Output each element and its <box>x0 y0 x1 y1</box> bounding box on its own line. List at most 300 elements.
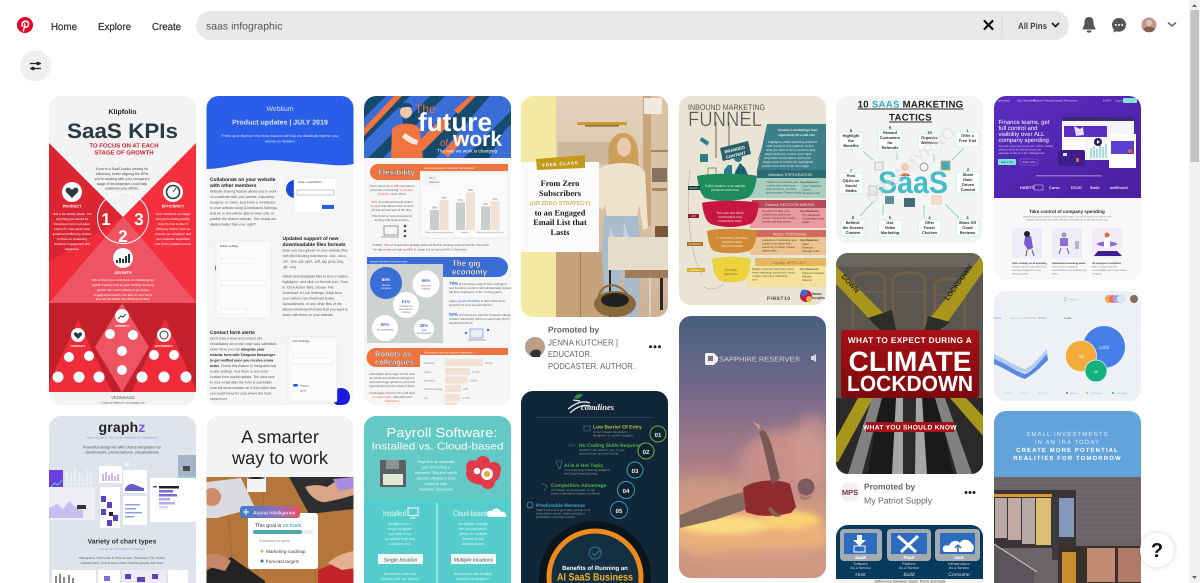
stage circle with numbers: 2 <box>118 227 128 246</box>
icon: laptop network <box>465 329 489 340</box>
advertiser name: PODCASTER. AUTHOR. <box>548 361 635 371</box>
funnel stage: advocacy: home marketing, social pitch, social <box>752 272 795 274</box>
benefit bubbles: Flexible <box>382 284 391 287</box>
intro text <box>94 167 150 190</box>
hero headline: visibility over ALL <box>998 131 1045 138</box>
section: robots as colleagues: Respondents who feel ready for automation <box>424 352 473 354</box>
headline box: LOCKDOWN <box>847 371 973 396</box>
section: robots as colleagues: Automation and image trends such <box>369 372 416 376</box>
bar chart: robots <box>445 359 483 405</box>
funnel stage: exploration: and outcomes. These include <box>766 192 802 194</box>
reason 05: 05 <box>616 508 623 515</box>
top bar: Search <box>1069 298 1079 302</box>
reason 03: AI is becoming massively adopted <box>564 468 610 472</box>
feature captions: All employees' workflows <box>1092 262 1122 265</box>
tactic labels: 9 <box>889 125 892 130</box>
reason 03: 03 <box>632 468 639 475</box>
section: robots as colleagues: Robots as <box>375 350 411 358</box>
bar chart: work preference: 50% <box>441 196 447 200</box>
icon: account chevron <box>1168 22 1176 26</box>
reason 01: Low Barrier Of Entry <box>593 424 642 430</box>
pin: The future of work <box>364 96 513 405</box>
description: Powerful design kit with charts templates for <box>83 444 162 450</box>
section: contact form alerts: Don't miss a lead and contact him <box>210 336 263 340</box>
section: contact form alerts: in site settings. And there is one more <box>210 370 268 374</box>
funnel stage: exploration: Publish and promotes your <box>766 181 798 184</box>
tactic labels: Content <box>846 230 861 235</box>
closing text: location and one person <box>381 577 419 581</box>
icon: product heart <box>62 182 82 202</box>
top bar <box>1064 295 1138 303</box>
tactic labels: Offer a <box>961 133 975 138</box>
flexibility text: flexibility" since 2019. <box>378 192 406 196</box>
escalators <box>836 398 983 474</box>
funnel stage: decision making: This web site offers <box>716 211 744 215</box>
section: contact form alerts: came from. <box>210 397 228 401</box>
project list <box>260 549 306 564</box>
teal content panel: with Content is the platform. Here's <box>767 144 814 148</box>
intro text: If you're a SaaS leader striving for <box>96 167 149 171</box>
purple hero <box>994 96 1141 198</box>
funnel stage: decision making: functionality and <box>718 215 742 219</box>
tactic labels: Share <box>963 172 974 177</box>
pin: Payroll software comparison <box>364 416 511 583</box>
top navigation bar <box>17 11 1176 40</box>
tactic labels: Media <box>845 188 857 193</box>
benefit bubbles: Self <box>422 329 426 332</box>
feature captions: reconciliations and bookkeeping <box>1052 269 1087 272</box>
benefit bubbles: 80% <box>381 322 389 327</box>
gig economy text: Again, greater flexibility is often cited as an <box>449 299 506 303</box>
stage labels <box>63 204 185 275</box>
bubble chart: 45 <box>1094 370 1098 374</box>
hero buttons <box>998 159 1038 165</box>
column text: Installed: and able to be <box>389 532 411 536</box>
progress bar <box>253 530 313 534</box>
SaaS tile <box>840 529 882 561</box>
IaaS tile: IaaS <box>954 555 964 560</box>
sub-label <box>863 422 957 432</box>
flexibility text: job posts mentioning "workplace <box>370 188 414 192</box>
pin: Inbound marketing funnel: FUNNEL <box>688 108 762 131</box>
subtitle <box>89 143 158 155</box>
intro text: stage of development could help <box>97 182 147 186</box>
headline <box>533 179 587 237</box>
nav link: Home: Home <box>51 22 77 33</box>
gig economy text: 92% of freelancers said the freelance lifestyle <box>449 312 513 317</box>
pin: bubble chart dashboard <box>994 291 1141 401</box>
section: robots as colleagues: Spain <box>424 371 431 374</box>
stage descriptions: only thing you should be <box>56 217 89 221</box>
gig economy text: and freelance workers will substantially replace <box>449 286 512 290</box>
closing text: Businesses with multiple <box>454 572 492 576</box>
tactic labels: 10 <box>927 130 932 135</box>
funnel stage: decision making: Key Measures: <box>800 210 819 213</box>
tactic labels: 5 <box>889 215 892 220</box>
avatar: MPS <box>842 488 858 497</box>
credit: Venngage <box>101 396 145 404</box>
headline: From Zero <box>541 179 579 188</box>
section tagline: Full set of chart styles & variations <box>99 547 145 551</box>
ad headline <box>1013 431 1122 462</box>
brand: Weblium: Weblium <box>266 105 294 113</box>
project list: Marketing roadmap <box>266 549 306 554</box>
caution tape top: DOWN <box>840 274 860 295</box>
gig economy text <box>449 281 513 325</box>
section: downloadable files: above-mentioned formats that you want to <box>282 308 348 312</box>
tactic labels: Social <box>845 183 857 188</box>
nav link: Explore: Explore <box>98 22 131 33</box>
funnel stage: advocacy: content, Send your marketing <box>752 275 788 278</box>
funnel stage: exploration <box>688 170 826 201</box>
tactic labels: 6 <box>852 215 855 220</box>
advertiser name: EDUCATOR. <box>548 349 592 359</box>
service verbs <box>855 572 970 578</box>
hero banner: work <box>452 128 502 151</box>
column text: Installed: accessed from that <box>385 537 415 541</box>
funnel stage: advocacy: Referral <box>802 279 812 282</box>
bar chart: work preference: 63% <box>468 189 474 192</box>
funnel stage: purchase: content must assist from <box>762 242 792 246</box>
tactic labels: the-Scenes <box>843 225 863 230</box>
headline <box>231 427 329 468</box>
tactic labels: 1 <box>966 128 969 133</box>
banner: multiple locations: Multiple locations <box>454 558 494 564</box>
section: downloadable files: your visitors can download books, <box>282 296 335 300</box>
feature captions <box>1012 262 1127 276</box>
logo strip: Curve <box>1049 186 1060 190</box>
help button: ? <box>1151 540 1163 562</box>
funnel stage: exploration: Visitors <box>802 188 811 192</box>
bar chart: work preference: 47% <box>492 198 498 201</box>
funnel stage: decision making: Top Influencers <box>802 214 821 217</box>
tactic labels: Offer <box>925 220 935 225</box>
funnel stage: decision making: Interest: DECISION MAKING <box>765 203 815 207</box>
funnel stage: purchase: Action: PURCHASE <box>773 232 807 236</box>
ad headline: CREATE MORE POTENTIAL <box>1016 447 1119 454</box>
stage circle with numbers <box>98 192 148 246</box>
brand name: SAPPHIRE RESERVE® <box>719 356 801 364</box>
stage circle with numbers: 3 <box>134 210 144 229</box>
brand logo <box>568 394 615 413</box>
section: robots as colleagues: 18.4% <box>470 380 478 382</box>
feature captions: Build a culture of spend <box>1092 266 1118 268</box>
promoted by: My Patriot Supply: Promoted by <box>864 482 916 492</box>
benefit bubbles: schedule <box>381 287 392 290</box>
column text: Cloud-based: devices to get <box>462 537 484 541</box>
section: robots as colleagues: to replace jobs, and with them <box>372 395 412 399</box>
hero nav: Contact <box>1053 98 1063 102</box>
footer strip <box>836 579 983 583</box>
search query text: saas infographic <box>206 20 282 32</box>
tactic labels: Reward <box>883 130 898 135</box>
column text: Cloud-based: the internet which <box>459 527 487 531</box>
chart mockups <box>49 455 196 528</box>
tag: branded content: CONTENT <box>725 150 747 160</box>
funnel stage: advocacy: Repeat Purchases <box>802 272 825 275</box>
advertiser name: My Patriot Supply <box>864 496 933 506</box>
ad headline: SMALL INVESTMENTS <box>1026 431 1109 438</box>
section: contact form alerts: to get notified once you receive a new <box>210 358 273 362</box>
section paragraph: Spending at work requires process and control. It's not so hard to be able to use <box>1023 216 1112 218</box>
section heading: Take control of company spending <box>1029 209 1105 214</box>
bar chart: work preference: 33% <box>432 206 438 210</box>
headline: Email List that <box>533 218 587 227</box>
brand: graphz <box>98 419 146 435</box>
section heading: Variety of chart types <box>88 538 157 546</box>
stage labels: PRODUCT <box>63 204 82 208</box>
feature illustrations <box>1012 228 1122 258</box>
headline box: CLIMATE <box>848 346 972 377</box>
funnel stage: purchase: search to purchase. Create <box>762 246 795 249</box>
teal content panel: opportunity for a mid-size <box>778 133 815 137</box>
hero nav: Resources <box>1064 98 1078 102</box>
icon: laptop <box>381 225 406 237</box>
flexibility text: This trend is most pronounced <box>372 214 413 218</box>
lower KPI pyramids <box>45 303 197 392</box>
bubble chart: 730 <box>1078 355 1084 359</box>
divider line <box>537 416 653 419</box>
funnel stage: advocacy: Key Measures: <box>800 268 819 271</box>
text panel <box>521 162 599 252</box>
tactic labels: Driven <box>962 182 975 187</box>
funnel stage: purchase: Sales <box>802 243 809 246</box>
reason 02: No Coding Skills Required <box>579 443 642 449</box>
benefit bubbles <box>370 267 440 341</box>
tactic labels: Behind- <box>846 220 861 225</box>
stage descriptions: efficiency metrics such as <box>156 227 191 231</box>
pin: climate lockdown ad <box>836 253 983 474</box>
tactic labels: Data- <box>963 177 974 182</box>
credits: FIRST10 <box>767 296 791 302</box>
bar chart: work preference: Option to work off-site part time <box>425 231 454 234</box>
hero buttons: Watch video <box>1022 161 1036 164</box>
tactic labels: Highlight <box>843 133 860 138</box>
hero banner: of <box>440 138 449 149</box>
ad headline: REALITIES FOR TOMORROW <box>1013 455 1122 462</box>
section: downloadable files: highlight it, and click on the link icon. Then <box>282 280 348 284</box>
brand logo: comdines <box>581 402 615 412</box>
logo strip: Swile <box>1090 186 1100 190</box>
dashboard mockups <box>1058 117 1136 168</box>
intro text: part of running a <box>422 466 451 470</box>
goal status: This goal is on track <box>255 523 302 529</box>
bar chart: work preference: Option to work off-site full time <box>477 231 504 234</box>
section: collaborate: to your website using Contributors Settings, <box>210 206 278 210</box>
closing text <box>381 572 492 581</box>
stage descriptions: happiness. <box>65 247 79 251</box>
small doodle icons <box>869 161 950 207</box>
stage circle with numbers: 1 <box>101 210 111 229</box>
feature captions: Automated accounting admin <box>1052 262 1086 265</box>
section: collaborate: always better than one, right? <box>210 222 256 226</box>
tactic labels: Host <box>847 173 856 178</box>
funnel stage: exploration: Key Measures: <box>800 181 819 184</box>
benefit bubbles: 61% <box>402 299 410 304</box>
chart type list: Labeled bars, Line & Area charts, Bubble graphs and more <box>81 561 164 565</box>
icon: clear search <box>984 21 992 29</box>
goal card <box>240 506 318 569</box>
icon: gear cloud <box>466 456 501 489</box>
section: contact form alerts: now will show website url & form label that <box>210 386 276 390</box>
lower KPI pyramids: GROWTH <box>115 324 129 328</box>
funnel stage: advocacy: now <box>752 278 757 282</box>
header subtitle: website on Weblium <box>265 140 295 144</box>
legend <box>1066 392 1128 395</box>
teal content panel: problems to move to the next stage <box>762 164 809 168</box>
tactic boxes <box>839 130 980 236</box>
flexibility text: among millennial workers. <box>375 218 410 222</box>
funnel stage: decision making: conversion tools <box>718 219 742 223</box>
section: contact form alerts <box>209 330 350 406</box>
search scope: All Pins: All Pins <box>1018 21 1047 31</box>
section: robots as colleagues: represent huge advances and new <box>369 380 416 384</box>
desk <box>608 226 668 317</box>
title: SaaS KPIs: SaaS KPIs <box>67 120 178 143</box>
tactic labels: Marketing <box>881 230 900 235</box>
basket <box>594 285 636 317</box>
column text: Cloud-based: Accessible through <box>458 522 488 526</box>
tactic labels: Reviews <box>960 230 975 235</box>
funnel stage: purchase: CONVERT <box>689 243 702 246</box>
column text: Cloud-based: simultaneously. <box>461 542 485 546</box>
watermark: DREAMYPRO <box>862 122 959 208</box>
tag: Asana Intelligence: Asana Intelligence <box>253 510 296 516</box>
stage descriptions: Your customers are happy <box>156 212 191 216</box>
hero banner: The way we work is changing <box>437 148 497 154</box>
headline box: WHAT TO EXPECT DURING A <box>848 336 972 345</box>
credit: Venngage: VENNGAGE <box>111 395 135 400</box>
section: robots as colleagues: as robots and artificial intelligence <box>369 376 415 380</box>
reason 02 <box>568 443 654 459</box>
tag: free class <box>536 155 585 170</box>
tactic labels: 3 <box>966 215 969 220</box>
intro text: efficiency, better aligning the KPIs <box>96 172 148 176</box>
sub-label: WHAT YOU SHOULD KNOW <box>863 424 957 432</box>
reason 03: AI Is A Hot Topic <box>564 463 603 469</box>
hero paragraph: Say hello, smart way spend less, control, visibility <box>998 145 1054 148</box>
section: robots as colleagues: employees. <box>384 399 400 403</box>
section: contact form alerts: Zapier <box>300 390 307 392</box>
feature captions: 100% visibility on all spending <box>1012 262 1047 265</box>
service verbs: Host <box>855 572 866 578</box>
funnel stage: purchase: Capitalize on marketing, your <box>762 239 797 242</box>
funnel stage: purchase: Key Measures: <box>800 239 819 242</box>
feature captions: Save hours on repetitive <box>1052 266 1078 268</box>
project list: Forecast targets <box>266 559 300 564</box>
service descriptions: As a Service <box>949 566 969 570</box>
teal content panel <box>757 124 826 170</box>
ad headline: IN AN IRA TODAY <box>1035 439 1100 446</box>
section paragraph <box>1023 216 1112 222</box>
section: downloadable files: Attach downloadable files to text or button, <box>282 274 348 278</box>
section: robots as colleagues: 11.7% <box>462 397 470 400</box>
section: flexibility: How people prefer to work after the pandemic <box>424 167 475 170</box>
tabs: Online <box>1038 316 1047 320</box>
stage labels: EFFICIENCY <box>162 204 185 208</box>
tactic labels: the <box>848 138 855 143</box>
column text: Installed <box>385 522 415 546</box>
section: gig economy: The gig <box>452 259 481 268</box>
tactic labels: Customers <box>880 135 900 140</box>
brand logo <box>705 353 816 365</box>
icon: floppy disk <box>380 460 406 487</box>
benefit bubbles: 84% <box>382 277 390 282</box>
funnel stage: exploration: Sessions Lead <box>802 192 820 195</box>
hero paragraph: automate all bills via 0.5% of Budget back <box>998 152 1046 155</box>
section: contact form alerts: How? Now you can integrate your <box>210 348 265 352</box>
flexibility text: to a job that allows them to work <box>371 204 414 208</box>
tactic labels: Free Trial <box>959 138 976 143</box>
promoted by: Jenna Kutcher <box>525 324 661 371</box>
stage descriptions: focusing on here is product- <box>53 222 91 226</box>
section: collaborate: Website sharing feature allows you to work <box>210 190 277 194</box>
icon: scope chevron <box>1052 23 1059 26</box>
tactic labels: 7 <box>850 168 852 173</box>
service verbs: Build <box>903 572 915 578</box>
title: Installed vs. Cloud-based <box>372 442 504 452</box>
service descriptions: As a Service <box>850 566 871 570</box>
sample tiles <box>52 570 188 583</box>
tag: branded content <box>720 141 751 161</box>
service verbs: Consume <box>948 572 970 578</box>
headline: to an Engaged <box>535 208 586 218</box>
teal content panel: Highlight a pitfall marketing problems <box>768 140 818 144</box>
header subtitle <box>222 134 339 142</box>
help button <box>1140 533 1174 567</box>
icon: notifications bell <box>1082 17 1096 33</box>
reason 04 <box>542 482 634 498</box>
section paragraph: solution that keeps your team efficient and informed every step of the way. <box>1026 218 1108 222</box>
stage descriptions: and you're scaling quickly. <box>156 217 191 221</box>
funnel stage: exploration: content about learning to <box>766 184 796 188</box>
advertiser name: JENNA KUTCHER | <box>548 338 618 348</box>
bubble chart: 1205 <box>1099 345 1110 351</box>
closing text: locations or people in <box>456 577 490 581</box>
section: collaborate <box>209 177 337 226</box>
logo strip: wellfound <box>1109 186 1128 190</box>
stage descriptions: revenue per employee and <box>155 232 191 236</box>
service descriptions: Software <box>853 562 868 566</box>
bar chart: work preference: 47% <box>458 199 464 202</box>
subtitle: STAGE OF GROWTH <box>94 150 154 156</box>
feature captions: spend payment. <box>1012 272 1029 276</box>
funnel stage: decision making: nurture. Impressions, social <box>762 217 795 220</box>
pin: 10 SaaS marketing tactics <box>836 96 983 243</box>
section: downloadable files: .gif, .svg. <box>282 265 297 269</box>
brand: Klipfolio: Klipfolio <box>108 108 136 116</box>
caution tape top <box>836 254 983 332</box>
credits <box>767 290 825 302</box>
description <box>83 444 162 454</box>
section: downloadable files: Button settings <box>220 244 239 248</box>
user avatar <box>1142 18 1156 32</box>
intro text: Payroll is an essential <box>418 460 455 464</box>
stage descriptions: lose too far ahead into efficiency metrics. <box>96 297 150 301</box>
tactic labels: Choices <box>922 230 937 235</box>
pin: Asana smarter way to work <box>203 416 354 583</box>
section: downloadable files <box>215 236 348 318</box>
tagline: Figma design kit with charts templates for dashboards <box>86 436 158 440</box>
filter button <box>20 50 51 82</box>
funnel path <box>688 170 726 289</box>
benefit bubbles: Freedom to <box>400 305 413 308</box>
pin: graphz chart templates <box>49 416 196 583</box>
stage descriptions: This is the startup phase. The <box>52 212 92 216</box>
connected projects: Connected projects <box>259 539 290 543</box>
benefit bubbles: development <box>417 332 431 335</box>
bar chart: work preference: Gen Z <box>429 176 436 180</box>
